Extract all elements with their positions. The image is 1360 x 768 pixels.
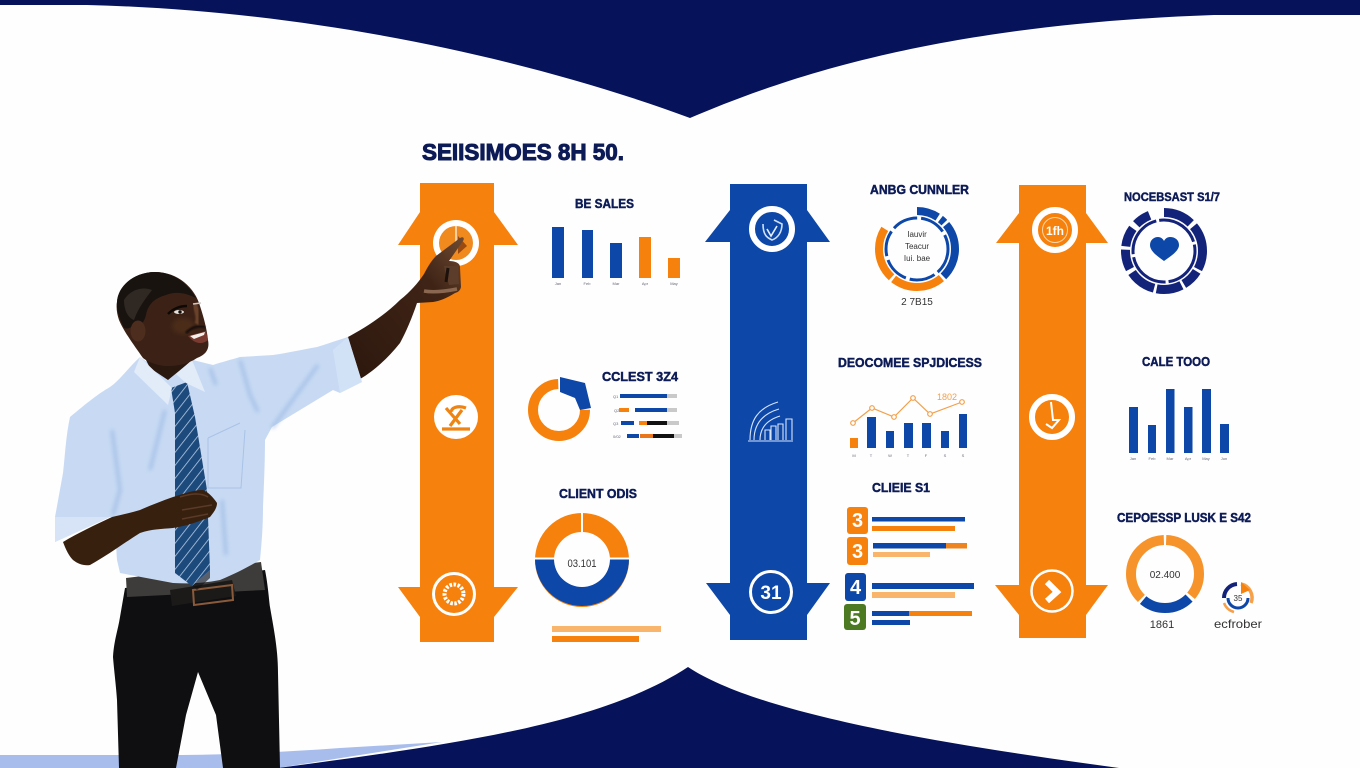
top navy banner xyxy=(0,0,1360,118)
heading: BE SALES xyxy=(575,197,634,211)
heading: ANBG CUNNLER xyxy=(870,183,969,197)
panel: clieie numbered bars: 4 xyxy=(850,577,862,599)
panel: deocomee combo chart: 1802 xyxy=(937,392,957,402)
arrow: orange right xyxy=(995,185,1108,638)
icon: badge with glyph xyxy=(1035,210,1075,250)
shirt xyxy=(55,337,362,583)
lower arm and hand xyxy=(63,490,217,565)
arrow: blue middle xyxy=(705,184,830,640)
panel: clieie numbered bars xyxy=(844,481,974,630)
panel: be sales bar chart: Mar xyxy=(613,281,620,286)
panel: anbg cunnler ring: Iui. bae xyxy=(904,254,931,263)
panel: anbg cunnler ring xyxy=(870,183,969,308)
small ring xyxy=(1224,582,1252,612)
icon: gear xyxy=(434,574,474,614)
panel: deocomee combo chart: F xyxy=(925,453,928,458)
panel: anbg cunnler ring: 2 7B15 xyxy=(901,297,933,308)
panel: deocomee combo chart: W xyxy=(888,453,892,458)
panel: cclest donut and bars xyxy=(533,370,682,439)
panel: cale tooo bar chart: Apr xyxy=(1185,456,1192,461)
arrow: orange left xyxy=(398,183,518,642)
panel: be sales bar chart: Apr xyxy=(642,281,649,286)
heading: CLIEIE S1 xyxy=(872,481,930,495)
icon: number badge xyxy=(750,572,792,612)
pointing arm and hand xyxy=(346,237,464,379)
person: presenter xyxy=(55,237,464,768)
curled fingers xyxy=(444,266,459,285)
panel: anbg cunnler ring: Teacur xyxy=(905,242,929,251)
bottom light blue band xyxy=(0,742,442,768)
neck xyxy=(142,350,192,380)
collar xyxy=(134,357,205,405)
panel: cepoessp donut: 02.400 xyxy=(1150,570,1181,581)
bottom navy banner xyxy=(278,667,1119,768)
panel: deocomee combo chart xyxy=(838,356,982,458)
trousers xyxy=(113,570,280,768)
panel: clieie numbered bars: 3 xyxy=(852,541,863,563)
panel: client odis donut: 03.101 xyxy=(568,558,596,570)
panel: be sales bar chart xyxy=(552,197,680,286)
panel: cepoessp donut xyxy=(1117,511,1262,631)
panel: be sales bar chart: Jan xyxy=(555,281,561,286)
panel: cale tooo bar chart: Feb xyxy=(1149,456,1156,461)
icon: badge with glyph: 1fh xyxy=(1046,224,1064,238)
icon: number badge: 31 xyxy=(760,583,782,604)
icon: line-art chart xyxy=(748,402,793,441)
heading: CCLEST 3Z4 xyxy=(602,370,678,384)
panel: cale tooo bar chart: May xyxy=(1202,456,1210,461)
belt xyxy=(126,562,265,597)
heading: CLIENT ODIS xyxy=(559,487,637,501)
panel: cale tooo bar chart xyxy=(1129,355,1229,461)
hair xyxy=(117,272,196,328)
hair fade xyxy=(124,288,152,320)
panel: cclest donut and bars: Q3 xyxy=(613,421,619,426)
panel: cclest donut and bars: Q1 xyxy=(613,394,619,399)
panel: cale tooo bar chart: Mar xyxy=(1167,456,1174,461)
face details xyxy=(168,303,208,343)
panel: cale tooo bar chart: Jan xyxy=(1130,456,1136,461)
heading: CALE TOOO xyxy=(1142,355,1210,369)
panel: cale tooo bar chart: Jun xyxy=(1221,456,1227,461)
panel: cclest donut and bars: 0/02 xyxy=(613,434,622,439)
icon: chevron xyxy=(1032,570,1072,612)
heading: DEOCOMEE SPJDICESS xyxy=(838,356,982,370)
icon: tools xyxy=(434,395,478,439)
panel: be sales bar chart: Feb xyxy=(584,281,591,286)
panel: nocebsast heart ring xyxy=(1124,190,1220,290)
panel: deocomee combo chart: S xyxy=(962,453,965,458)
icon: shield check xyxy=(752,209,792,249)
panel: deocomee combo chart: T xyxy=(870,453,873,458)
panel: cepoessp donut: 1861 xyxy=(1150,619,1174,631)
panel: be sales bar chart: May xyxy=(670,281,678,286)
small ring: 35 xyxy=(1234,594,1243,603)
buckle tip shade xyxy=(192,570,210,590)
icon: top target xyxy=(433,220,479,266)
head xyxy=(117,272,208,366)
panel: cepoessp donut: ecfrober xyxy=(1214,617,1262,631)
panel: cclest donut and bars: Q2 xyxy=(614,408,620,413)
panel: clieie numbered bars: 5 xyxy=(849,608,861,630)
panel: deocomee combo chart: S xyxy=(944,453,947,458)
heading: NOCEBSAST S1/7 xyxy=(1124,190,1220,204)
ear xyxy=(130,320,146,342)
tie xyxy=(171,382,210,586)
heading: CEPOESSP LUSK E S42 xyxy=(1117,511,1251,525)
panel: deocomee combo chart: M xyxy=(852,453,856,458)
icon: clock check xyxy=(1032,397,1072,437)
shirt shading xyxy=(112,360,318,555)
panel: clieie numbered bars: 3 xyxy=(852,510,863,532)
panel: deocomee combo chart: T xyxy=(907,453,910,458)
title: SEIISIMOES 8H 50. xyxy=(422,139,624,165)
panel: client odis donut xyxy=(534,487,661,642)
panel: anbg cunnler ring: Iauvir xyxy=(907,230,927,239)
